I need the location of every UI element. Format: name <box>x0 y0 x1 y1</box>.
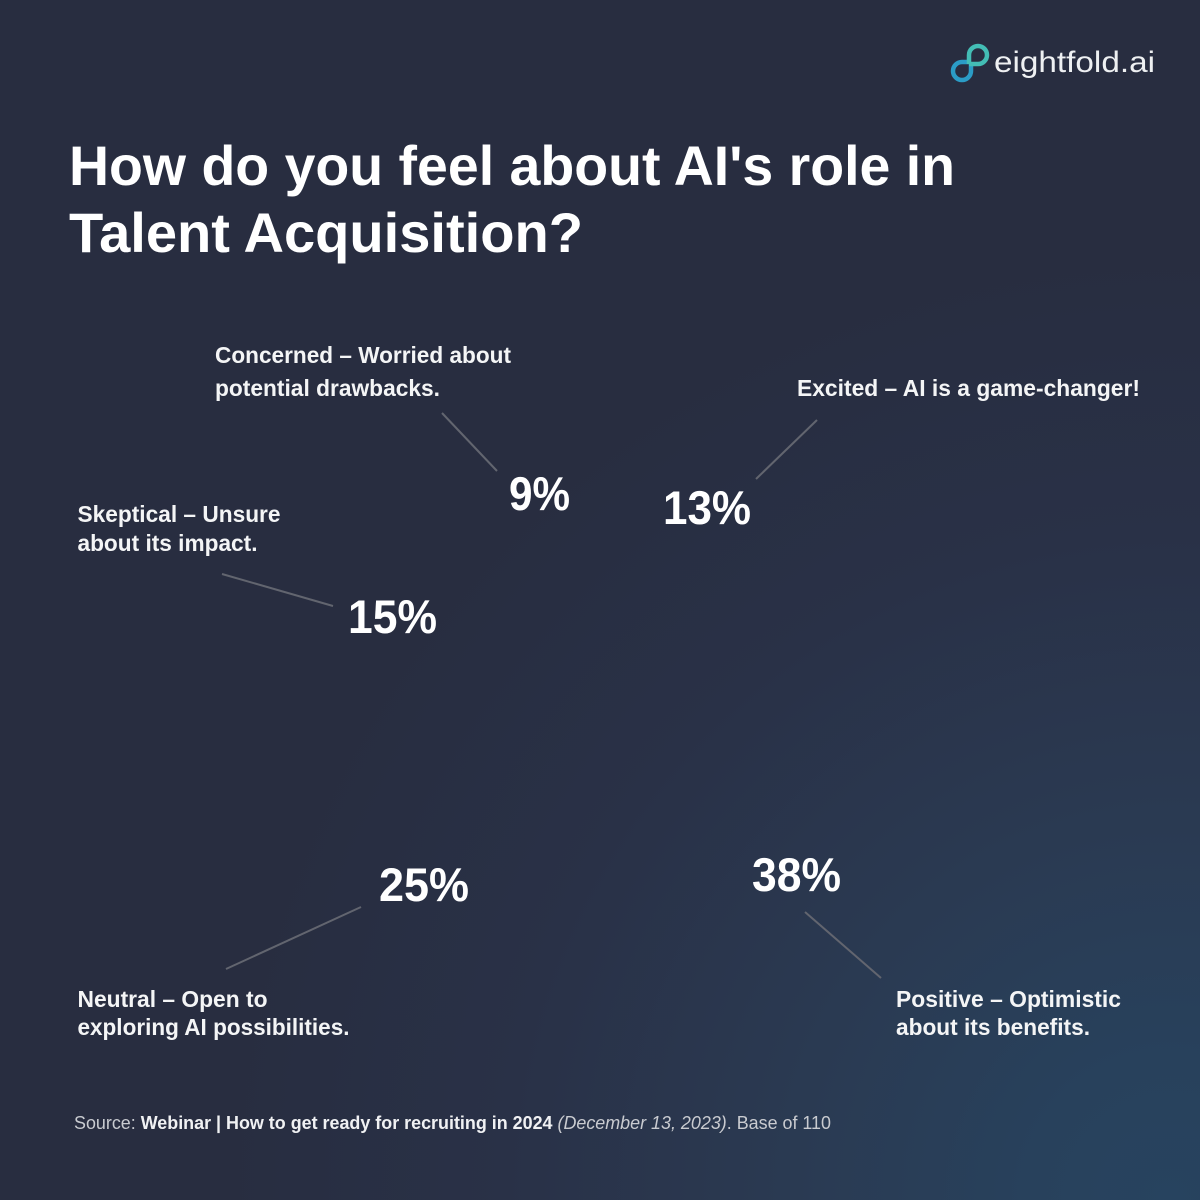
callout: excited 13% <box>663 375 1140 534</box>
value: 38%: 38% <box>752 848 841 901</box>
icon: infinity knot <box>953 46 987 80</box>
label: neutral: exploring AI possibilities. <box>78 1014 350 1040</box>
wordmark: eightfold.ai <box>994 46 1155 79</box>
value: 9%: 9% <box>509 467 570 520</box>
label: concerned <box>215 342 511 401</box>
label: positive: Positive – Optimistic <box>896 986 1121 1012</box>
source note: Source: Webinar | How to get ready for recruiting in 2024 (December 13, 2023). Base of 110 <box>74 1113 831 1133</box>
value: 13%: 13% <box>663 481 751 534</box>
logo: eightfold.ai <box>953 46 1155 80</box>
label: skeptical: Skeptical – Unsure <box>78 501 280 527</box>
value: 15%: 15% <box>348 590 437 643</box>
title: Talent Acquisition? <box>69 201 583 264</box>
callout: concerned 9% <box>215 342 570 520</box>
callout: skeptical 15% <box>78 501 437 643</box>
leader line: excited <box>756 420 817 479</box>
leader line: skeptical <box>222 574 333 606</box>
label: neutral: Neutral – Open to <box>78 986 268 1012</box>
label: neutral <box>78 986 350 1040</box>
callout: neutral 25% <box>78 858 469 1040</box>
label: concerned: potential drawbacks. <box>215 375 440 401</box>
label: skeptical: about its impact. <box>78 530 258 556</box>
label: skeptical <box>78 501 280 556</box>
leader line: concerned <box>442 413 497 471</box>
title: How do you feel about AI's role in <box>69 134 955 197</box>
leader line: neutral <box>226 907 361 969</box>
leader line: positive <box>805 912 881 978</box>
value: 25%: 25% <box>379 858 469 911</box>
label: positive: about its benefits. <box>896 1014 1090 1040</box>
label: positive <box>896 986 1121 1040</box>
label: concerned: Concerned – Worried about <box>215 342 511 368</box>
title <box>69 134 955 264</box>
callout: positive 38% <box>752 848 1121 1040</box>
label: excited: Excited – AI is a game-changer! <box>797 375 1140 401</box>
